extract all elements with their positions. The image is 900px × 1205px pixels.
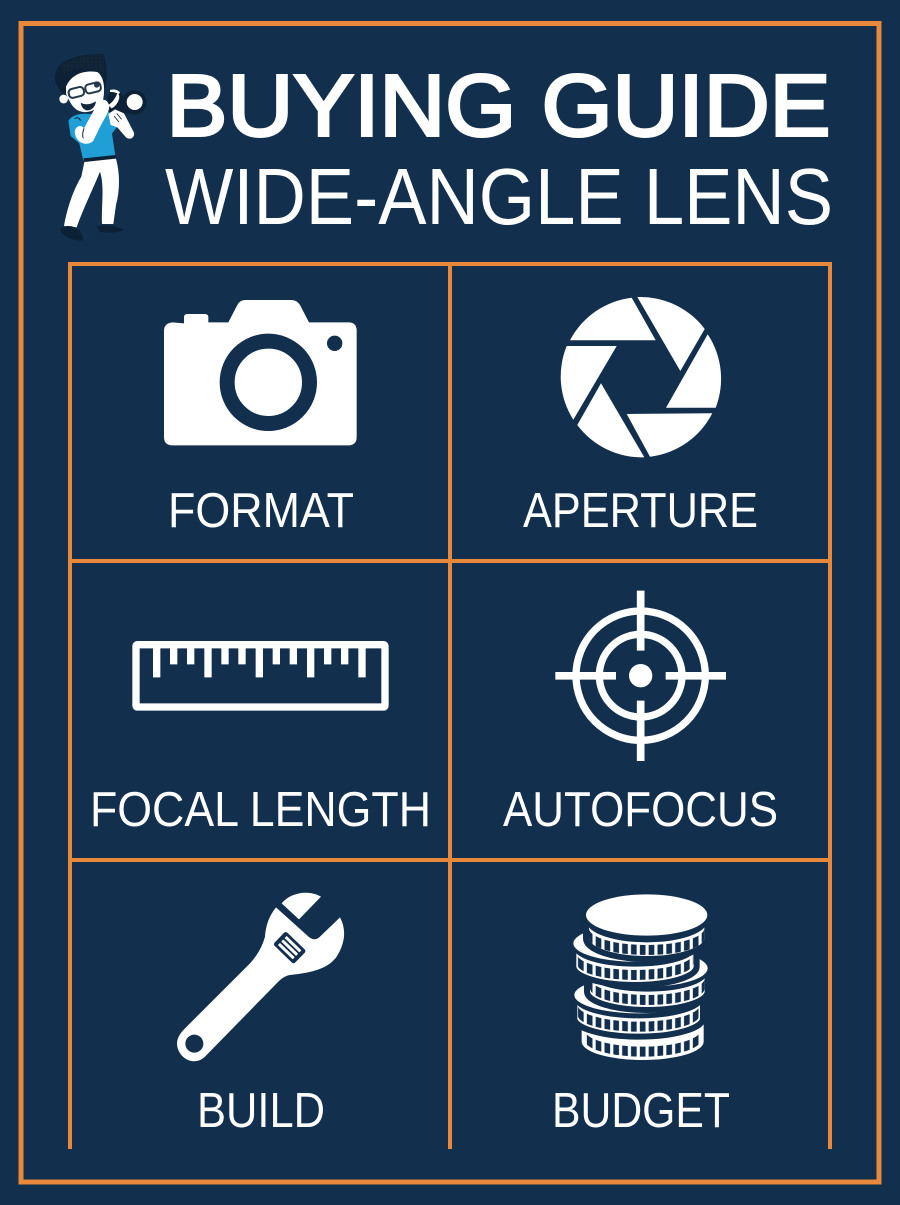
title: buying guide: BUYING GUIDE	[166, 58, 831, 154]
icon: camera	[164, 300, 357, 445]
panel: build	[72, 862, 448, 1149]
icon: ruler	[136, 645, 385, 707]
icon: wrench	[177, 893, 344, 1061]
icon: target	[555, 591, 726, 761]
coin 2	[573, 925, 697, 985]
coin 4	[574, 977, 703, 1037]
subtitle: wide-angle lens: WIDE-ANGLE LENS	[165, 152, 833, 241]
coin 1	[586, 894, 707, 959]
label: budget: BUDGET	[552, 1084, 730, 1138]
label: format: FORMAT	[168, 484, 354, 538]
panel: autofocus	[452, 563, 828, 858]
panel: budget	[452, 862, 828, 1149]
panel: aperture	[452, 266, 828, 559]
label: build: BUILD	[197, 1084, 325, 1138]
coin 3	[587, 950, 708, 1010]
icon: photographer character	[55, 54, 147, 241]
panel: format	[72, 266, 448, 559]
header	[55, 54, 833, 241]
coin 5	[582, 1020, 704, 1060]
icon: aperture	[561, 297, 721, 457]
panel: focal length	[72, 563, 448, 858]
label: focal length: FOCAL LENGTH	[90, 783, 431, 837]
grid lines	[68, 264, 832, 1149]
label: aperture: APERTURE	[523, 484, 758, 538]
icon: coin stack	[573, 894, 708, 1060]
label: autofocus: AUTOFOCUS	[503, 783, 778, 837]
